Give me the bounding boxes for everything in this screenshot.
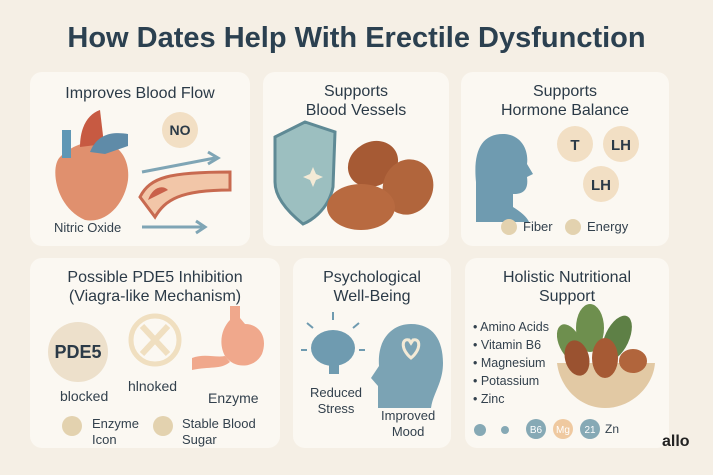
heading: Possible PDE5 Inhibition (67, 269, 243, 286)
panel: hormone balance (461, 72, 669, 246)
illustration: heart, vessel, NO (55, 110, 232, 234)
icons: nutrient badges: Zn (605, 422, 619, 436)
heading: Improves Blood Flow (65, 85, 215, 102)
icons: nutrient badges: B6 (530, 425, 543, 436)
panel: hormone balance: Energy (587, 219, 628, 234)
heading (306, 83, 406, 119)
panel: PDE5 inhibition: Enzyme (92, 416, 139, 431)
heading: Support (539, 288, 595, 305)
illustration: head silhouette and hormone badges (475, 126, 639, 235)
logo: allo health: allo (662, 433, 690, 450)
labels: Stress (318, 401, 354, 416)
panel: psychological well-being: Improved (381, 408, 435, 423)
heading: Holistic Nutritional (503, 269, 631, 286)
labels: blocked (60, 388, 108, 404)
panel: supports blood vessels (263, 72, 449, 246)
heading: Supports (324, 83, 388, 100)
heading: (Viagra-like Mechanism) (69, 288, 241, 305)
panel: PDE5 inhibition: Stable Blood (182, 416, 256, 431)
heading (503, 269, 631, 305)
icons: nutrient badges (474, 419, 619, 439)
panel: holistic nutritional support (465, 258, 669, 448)
heading (323, 269, 421, 305)
illustration: PDE5, blocked, stomach: PDE5 (54, 342, 102, 362)
panel: PDE5 inhibition (30, 258, 280, 448)
illustration: head silhouette and hormone badges: LH (611, 137, 631, 154)
labels: Reduced (310, 385, 362, 400)
nutrient list: • Vitamin B6 (473, 338, 541, 352)
illustration: PDE5, blocked, stomach (48, 306, 264, 436)
nutrient list: • Zinc (473, 392, 504, 406)
nutrient list: • Amino Acids (473, 320, 549, 334)
title: How Dates Help With Erectile Dysfunction (67, 22, 646, 54)
heading (501, 83, 629, 119)
panel: PDE5 inhibition: Enzyme (208, 390, 259, 406)
heading: Psychological (323, 269, 421, 286)
heading (67, 269, 243, 305)
nutrient list: • Potassium (473, 374, 539, 388)
heading: Supports (533, 83, 597, 100)
heading: Well-Being (333, 288, 411, 305)
illustration: bowl of dates with greens (556, 304, 655, 408)
nutrient list: • Magnesium (473, 356, 545, 370)
panel: PDE5 inhibition: Icon (92, 432, 117, 447)
heading: Hormone Balance (501, 102, 629, 119)
panel: PDE5 inhibition: Sugar (182, 432, 217, 447)
labels: fiber, energy: Fiber (523, 219, 553, 234)
illustration: shield and dates (274, 120, 434, 230)
illustration: head silhouette and hormone badges: LH (591, 177, 611, 194)
label: nitric oxide: Nitric Oxide (54, 220, 121, 235)
illustration: heart, vessel, NO: NO (170, 122, 191, 138)
icons: nutrient badges: Mg (556, 425, 570, 436)
panel: improves blood flow (30, 72, 250, 246)
panel: PDE5 inhibition: hlnoked (128, 378, 177, 394)
illustration: brain and head with heart (301, 312, 443, 408)
icons: nutrient badges: 21 (584, 425, 596, 436)
labels (310, 385, 362, 416)
illustration: head silhouette and hormone badges: T (570, 137, 580, 154)
panel: psychological well-being: Mood (392, 424, 424, 439)
panel: psychological well-being (293, 258, 451, 448)
nutrient list (473, 320, 549, 406)
heading: Blood Vessels (306, 102, 406, 119)
